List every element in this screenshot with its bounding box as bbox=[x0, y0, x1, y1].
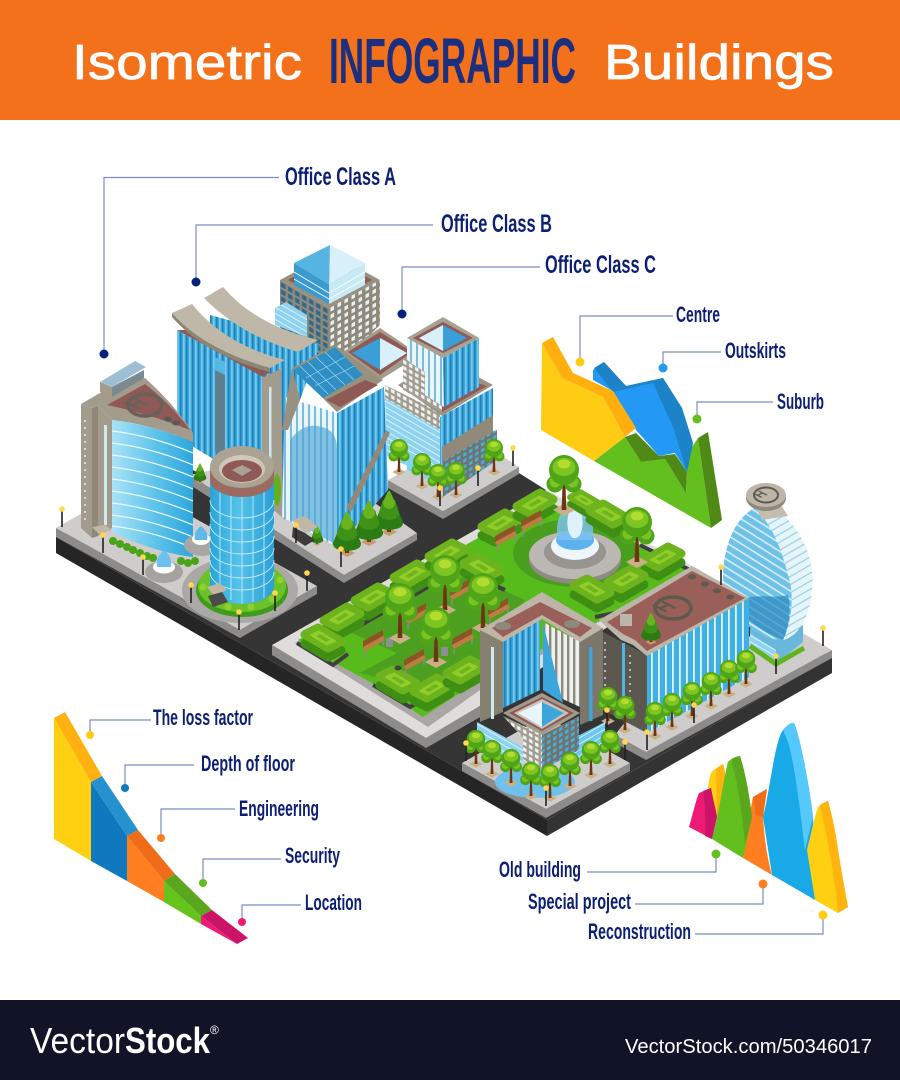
asphalt slab bbox=[56, 470, 832, 836]
callout: Suburb: Suburb bbox=[777, 389, 824, 414]
callout: Office Class C: Office Class C bbox=[545, 251, 656, 279]
callout: Outskirts: Outskirts bbox=[725, 338, 786, 363]
callout: Old building: Old building bbox=[499, 857, 581, 882]
blue series bbox=[593, 362, 693, 472]
park block bbox=[272, 490, 700, 748]
building: Office with helipad and curved glass bbox=[81, 361, 193, 557]
fountains on front-left block bbox=[145, 526, 220, 583]
building: Office Class B twin towers bbox=[172, 287, 320, 520]
brand: Vector: Vector bbox=[30, 1020, 125, 1061]
callout: The loss factor: The loss factor bbox=[153, 705, 253, 730]
callout: Suburb bbox=[692, 389, 824, 424]
callout: Office Class C bbox=[398, 251, 656, 318]
building: Office Class A pyramid tower bbox=[275, 245, 380, 375]
building: solar roof glass tower bbox=[282, 345, 390, 547]
building: U-shaped block with pyramid bbox=[477, 592, 605, 798]
image id: VectorStock.com/50346017 bbox=[625, 1036, 872, 1058]
callout: Reconstruction bbox=[588, 910, 828, 944]
helipad: H bbox=[118, 395, 155, 412]
helipad bbox=[118, 394, 162, 416]
sidewalk block: right bbox=[615, 620, 832, 760]
trash bins bbox=[386, 638, 448, 670]
green series bbox=[594, 437, 711, 528]
yellow series bbox=[541, 343, 625, 461]
callout: Office Class B: Office Class B bbox=[441, 210, 552, 238]
callout: Security: Security bbox=[285, 843, 340, 868]
callout: Special project bbox=[528, 880, 768, 914]
round glass tower with garden bbox=[196, 446, 288, 617]
callout: Centre bbox=[576, 302, 720, 366]
park trees bbox=[382, 455, 654, 668]
callout: Outskirts bbox=[658, 338, 786, 372]
callout: Engineering: Engineering bbox=[239, 796, 319, 821]
glass annex bbox=[275, 302, 307, 337]
lower annex bbox=[442, 430, 497, 497]
street lamps bbox=[59, 445, 826, 806]
title: Buildings: Buildings bbox=[604, 36, 834, 90]
callout: Reconstruction: Reconstruction bbox=[588, 919, 691, 944]
park benches bbox=[363, 510, 543, 676]
park hedges bbox=[305, 492, 681, 707]
rear glass pyramid bbox=[343, 328, 420, 380]
columns bbox=[480, 630, 503, 722]
base box roof bbox=[503, 693, 580, 735]
street trees bbox=[465, 650, 757, 802]
chart: Centre Outskirts Suburb bbox=[541, 337, 722, 528]
isometric city model bbox=[56, 245, 832, 836]
roof kiosk bbox=[100, 382, 112, 397]
roof helipad: H bbox=[646, 598, 683, 615]
callout: The loss factor bbox=[86, 705, 253, 739]
hedge mats bbox=[297, 545, 690, 707]
base box faces bbox=[503, 716, 542, 770]
building: flat office with helipad bbox=[599, 566, 749, 733]
park lawn bbox=[298, 500, 690, 717]
callout: Centre: Centre bbox=[676, 302, 720, 327]
footer bar bbox=[0, 1000, 900, 1080]
building: Office Class C stepped tower bbox=[343, 317, 497, 497]
courtyard walls bbox=[503, 620, 540, 708]
callout: Special project: Special project bbox=[528, 889, 631, 914]
small pine behind bbox=[194, 464, 206, 484]
callout: Location: Location bbox=[305, 890, 362, 915]
callout: Office Class A: Office Class A bbox=[285, 163, 396, 191]
header banner bbox=[0, 0, 900, 120]
grid block bbox=[403, 358, 442, 412]
upper tower bbox=[407, 338, 444, 407]
callout: Security bbox=[199, 843, 340, 887]
fountain in park bbox=[529, 504, 621, 584]
hedge row bbox=[109, 537, 199, 567]
chart: loss factor to location bbox=[54, 712, 248, 944]
title: INFOGRAPHIC: INFOGRAPHIC bbox=[329, 25, 576, 97]
title: Isometric: Isometric bbox=[72, 36, 302, 90]
sidewalk block: back-right bbox=[388, 435, 519, 519]
glass pyramid bbox=[294, 263, 329, 304]
diagonal brace bbox=[346, 430, 390, 512]
trees and pines on middle block bbox=[273, 439, 504, 557]
chart: old building special project reconstruction bbox=[689, 723, 848, 913]
roof helipad bbox=[646, 597, 691, 619]
podium bbox=[385, 398, 440, 480]
brand: Stock: Stock bbox=[125, 1020, 211, 1061]
callout: Office Class B bbox=[192, 210, 552, 286]
pool bbox=[495, 766, 575, 798]
sidewalk block: front bbox=[462, 716, 630, 818]
solar panel bbox=[293, 347, 363, 398]
sidewalk block: front-left bbox=[56, 484, 317, 638]
rooftop helipad bbox=[746, 483, 786, 511]
curved roofs bbox=[204, 287, 318, 352]
rooftop helipad: H bbox=[749, 489, 771, 499]
callout: Old building bbox=[499, 850, 720, 882]
sidewalk block: middle bbox=[190, 450, 417, 583]
callout: Depth of floor: Depth of floor bbox=[201, 751, 295, 776]
callout: Location bbox=[238, 890, 362, 926]
callout: Engineering bbox=[157, 796, 319, 842]
roof bbox=[480, 592, 603, 642]
registered mark: ® bbox=[210, 1023, 219, 1037]
glass wings bbox=[477, 722, 523, 765]
callout: Depth of floor bbox=[121, 751, 295, 792]
entrance bbox=[407, 455, 430, 480]
building: tall egg-shaped tower bbox=[723, 483, 813, 664]
callout: Office Class A bbox=[100, 163, 396, 358]
